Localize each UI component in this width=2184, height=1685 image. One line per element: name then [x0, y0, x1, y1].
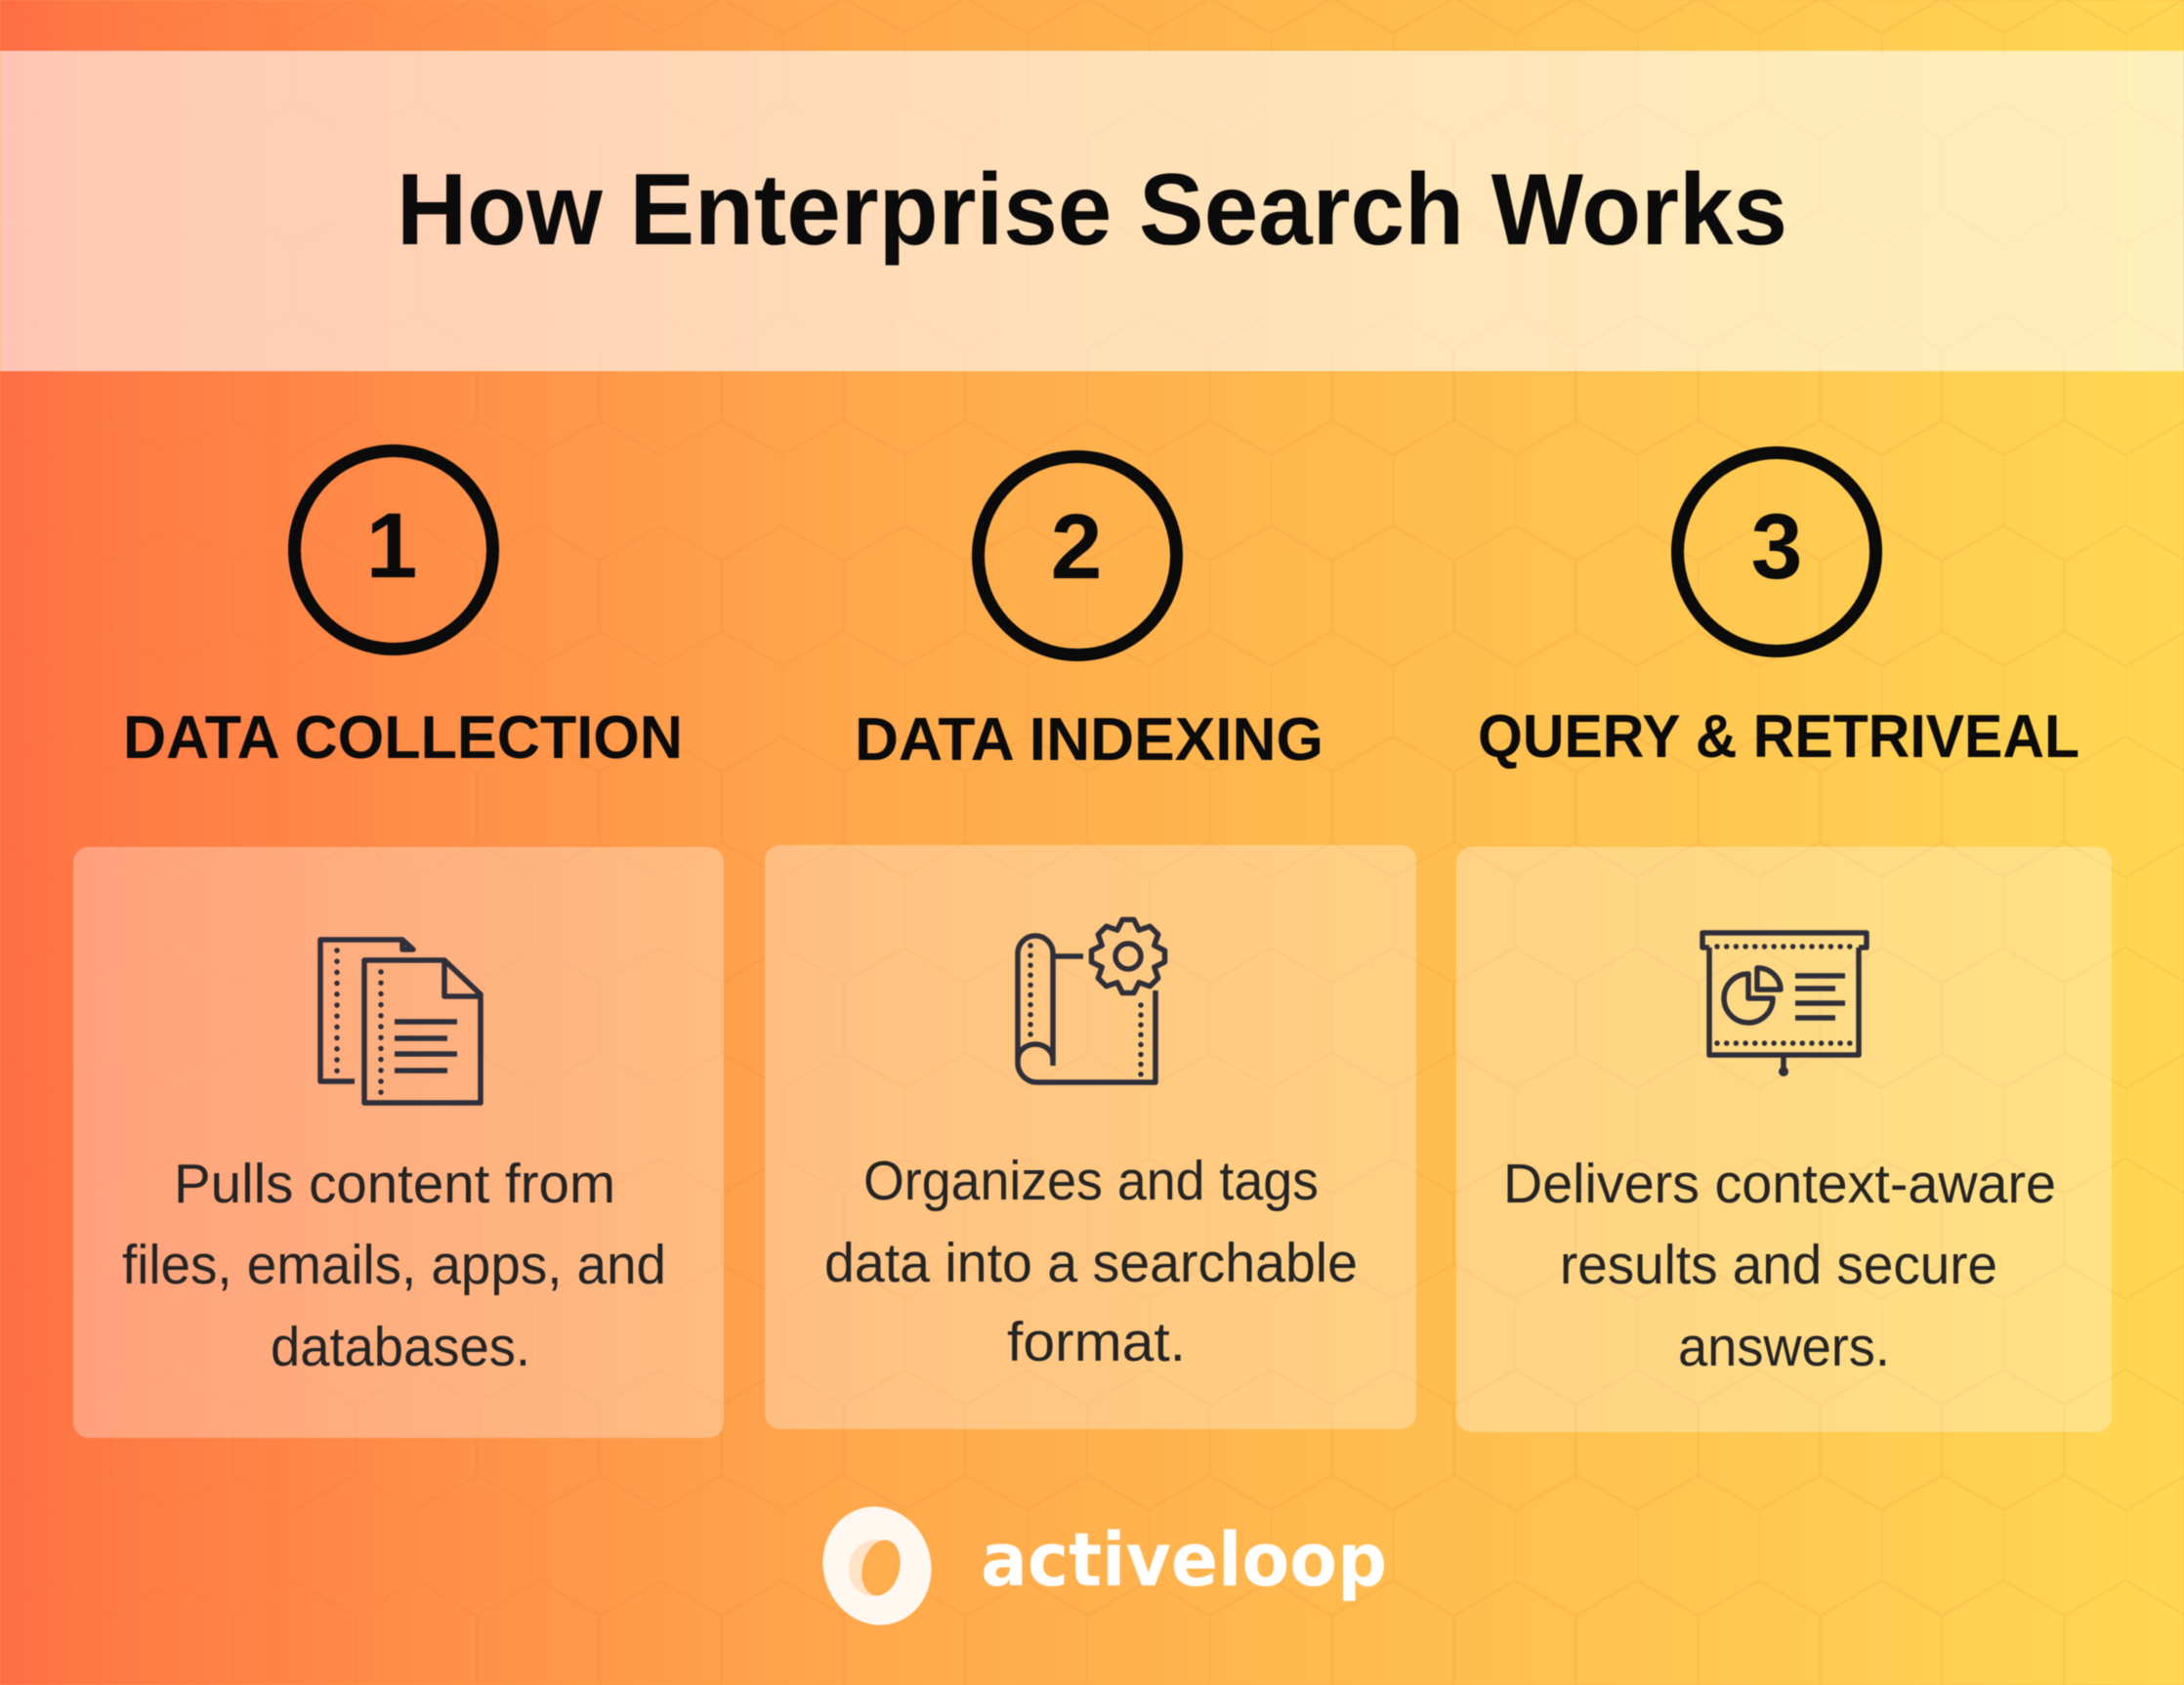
description: data indexing: Organizes and tags	[863, 1150, 1319, 1212]
step 1 number badge: 1	[366, 494, 417, 598]
step 1 heading: DATA COLLECTION	[123, 704, 683, 772]
panel: data collection	[73, 847, 724, 1438]
step 2 number badge: 2	[1051, 495, 1102, 599]
icon: scroll and gear	[1018, 920, 1164, 1082]
icon: documents	[320, 940, 481, 1103]
icon: logo ring	[809, 1494, 945, 1638]
description: data collection: files, emails, apps, and	[122, 1234, 666, 1296]
icon: presentation screen	[1702, 933, 1867, 1076]
description: query and retrieval: results and secure	[1560, 1234, 1997, 1296]
description: data indexing: data into a searchable	[824, 1232, 1358, 1294]
description: data indexing: format.	[1007, 1311, 1186, 1373]
step 2 number badge	[979, 457, 1176, 654]
description: data collection: Pulls content from	[174, 1153, 615, 1215]
panel: query and retrieval	[1456, 847, 2112, 1432]
step 3 number badge: 3	[1751, 495, 1802, 599]
step 2 heading: DATA INDEXING	[855, 706, 1323, 774]
step 1 number badge	[295, 451, 492, 649]
activeloop logo	[809, 1494, 1387, 1638]
panel: data indexing	[765, 845, 1416, 1429]
description: query and retrieval: answers.	[1678, 1316, 1890, 1378]
description: query and retrieval: Delivers context-aware	[1503, 1153, 2056, 1215]
step 3 number badge	[1678, 453, 1875, 651]
title banner	[0, 51, 2184, 371]
logo wordmark: activeloop	[981, 1516, 1387, 1603]
step 3 heading: QUERY & RETRIVEAL	[1478, 703, 2079, 771]
title: How Enterprise Search Works	[397, 153, 1787, 267]
description: data collection: databases.	[271, 1316, 530, 1378]
